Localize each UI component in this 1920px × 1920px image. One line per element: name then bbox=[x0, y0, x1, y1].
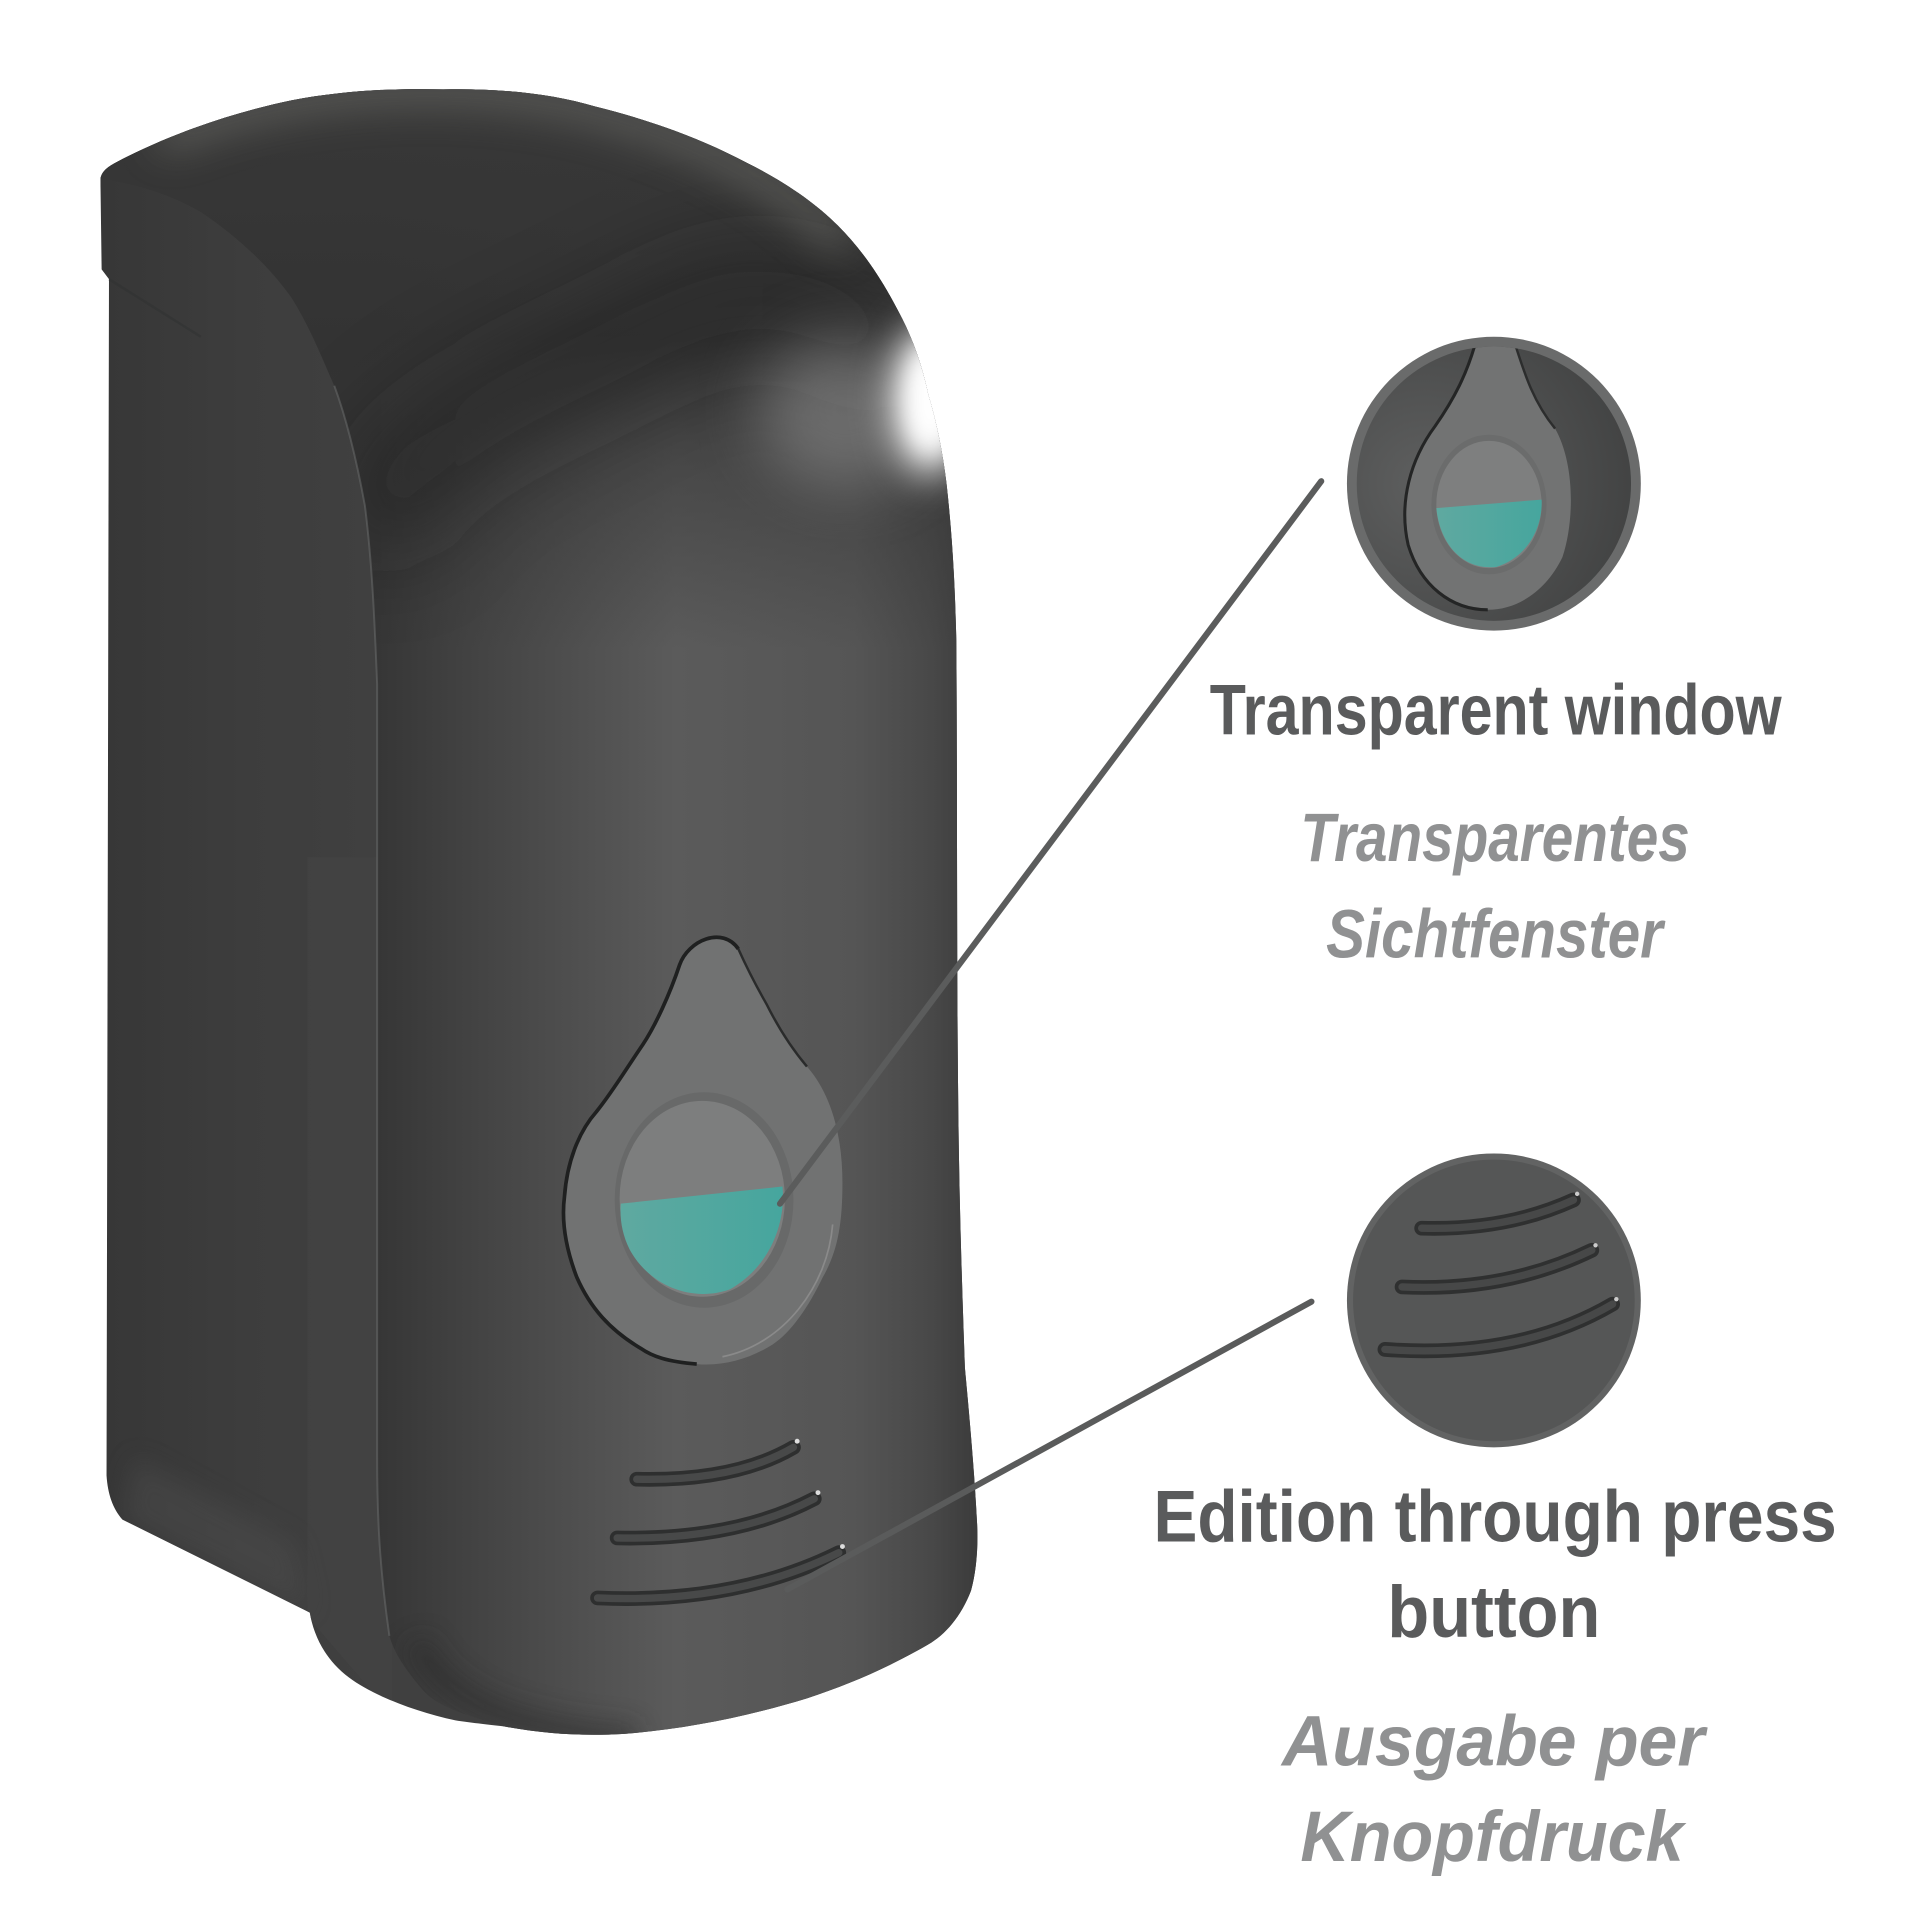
subheading: Ausgabe per Knopfdruck: Ausgabe per bbox=[1280, 1703, 1708, 1782]
subheading: Transparentes Sichtfenster: Sichtfenster bbox=[1326, 896, 1666, 973]
detail teal liquid bbox=[1436, 500, 1542, 567]
detail drop bbox=[1405, 343, 1571, 610]
body lip detail bbox=[109, 279, 201, 337]
drop window on dispenser bbox=[563, 937, 842, 1365]
teal liquid level bbox=[621, 1187, 783, 1294]
drop dark upper right edge bbox=[738, 949, 807, 1067]
detail circle: press button bbox=[1347, 1153, 1641, 1447]
drop shape bbox=[563, 937, 842, 1365]
window ring bbox=[615, 1092, 793, 1308]
dispenser front shell bbox=[73, 73, 1004, 1763]
detail circle: transparent window bbox=[1347, 337, 1641, 631]
drop dark left edge bbox=[563, 937, 738, 1364]
heading: edition through press button: button bbox=[1387, 1570, 1600, 1653]
dispenser side panel bbox=[73, 73, 1004, 1763]
drop light right edge bbox=[722, 1224, 833, 1357]
leader line: press button bbox=[787, 1302, 1311, 1589]
heading: transparent window: Transparent window bbox=[1210, 672, 1782, 751]
grooves on dispenser button bbox=[598, 1439, 845, 1599]
heading: edition through press button bbox=[1153, 1475, 1837, 1653]
heading: edition through press button: Edition through press bbox=[1153, 1475, 1837, 1558]
leader line: transparent window bbox=[780, 481, 1321, 1204]
detail window glass bbox=[1436, 441, 1542, 568]
subheading: Ausgabe per Knopfdruck: Knopfdruck bbox=[1300, 1798, 1687, 1877]
body seam edge bbox=[334, 386, 389, 1636]
dispenser body bbox=[73, 73, 1004, 1763]
window glass bbox=[620, 1101, 785, 1297]
subheading: Ausgabe per Knopfdruck bbox=[1280, 1703, 1708, 1877]
detail window ring bbox=[1431, 435, 1547, 574]
subheading: Transparentes Sichtfenster: Transparentes bbox=[1300, 799, 1690, 876]
subheading: Transparentes Sichtfenster bbox=[1300, 799, 1690, 973]
